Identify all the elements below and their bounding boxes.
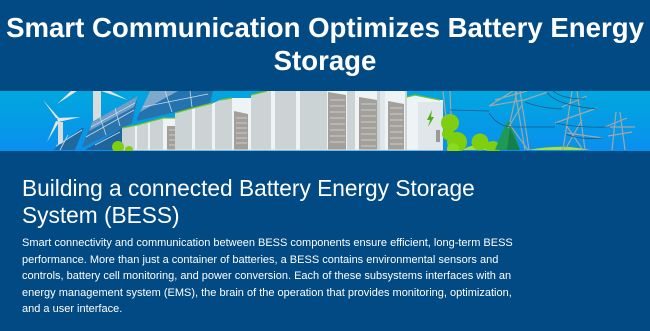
icon: battery storage containers [122, 91, 443, 150]
section heading [22, 175, 475, 228]
icon: green bushes and tree [112, 114, 590, 155]
body text: controls, battery cell monitoring, and power conversion. Each of these subsystems interfaces with an [22, 270, 511, 282]
icon: transmission towers [443, 91, 635, 150]
section heading: Building a connected Battery Energy Storage [22, 175, 475, 201]
title: Storage [274, 45, 376, 76]
body text: performance. More than just a container of batteries, a BESS contains environmental sensors and [22, 254, 498, 266]
banner illustration [0, 91, 650, 151]
title: Smart Communication Optimizes Battery Energy [6, 12, 644, 43]
section heading: System (BESS) [22, 202, 180, 228]
icon: solar panels [53, 91, 213, 150]
body text: Smart connectivity and communication between BESS components ensure efficient, long-term BESS [22, 237, 513, 249]
body text: and a user interface. [22, 303, 122, 315]
body text [22, 237, 513, 315]
icon: wind turbines [43, 91, 128, 144]
body text: energy management system (EMS), the brain of the operation that provides monitoring, optimization, [22, 287, 512, 299]
title [6, 12, 644, 76]
